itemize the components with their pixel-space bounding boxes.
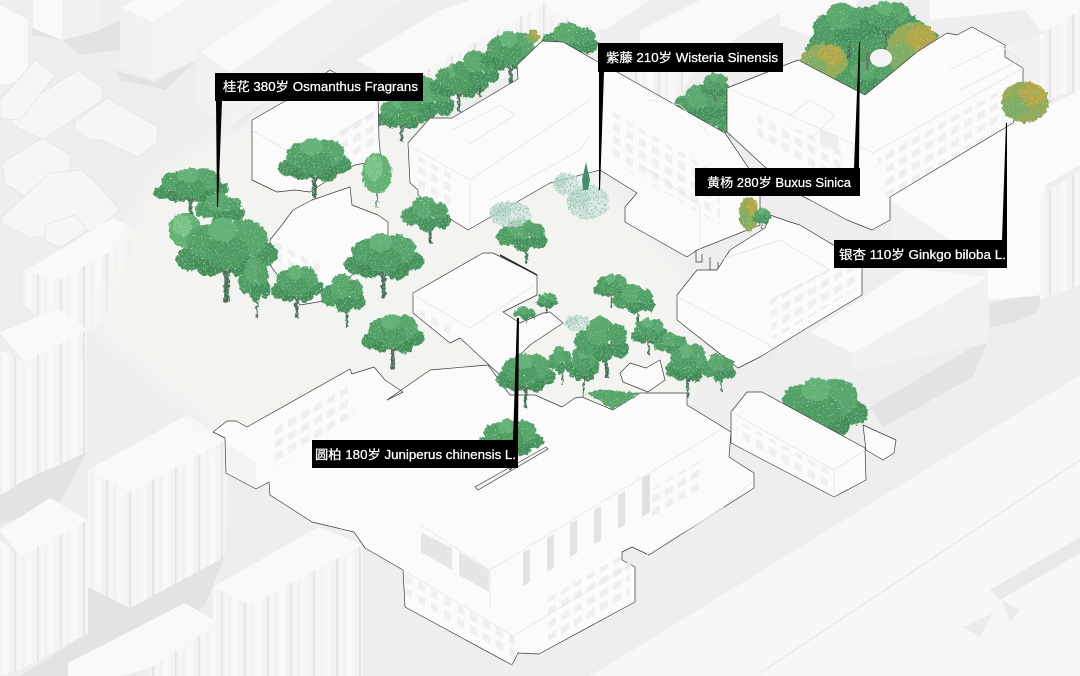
pale fading trees [489, 173, 609, 331]
label: Juniperus chinensis: 圆柏 180岁 Juniperus chinensis L. [315, 447, 516, 462]
residential towers [0, 218, 363, 676]
tree behind south-east building [772, 378, 868, 460]
label: Ginkgo biloba [834, 123, 1007, 268]
label: Osmanthus Fragrans [215, 73, 423, 207]
gate fragments [696, 250, 732, 274]
building: north long block [408, 41, 760, 257]
hedge [587, 390, 640, 410]
label: Buxus Sinica: 黄杨 280岁 Buxus Sinica [707, 175, 851, 190]
courtyard trees north [279, 138, 655, 369]
pale courtyard ring [870, 49, 892, 67]
label: Osmanthus Fragrans: 桂花 380岁 Osmanthus Fragrans [223, 79, 418, 94]
label: Ginkgo biloba: 银杏 110岁 Ginkgo biloba L. [839, 247, 1006, 262]
small annex building [620, 360, 665, 392]
eastern blocks [590, 90, 1080, 676]
small western houses [0, 60, 158, 248]
yellow tree and shrub [739, 197, 772, 232]
central tree cluster [476, 292, 736, 470]
label: Buxus Sinica [695, 42, 860, 196]
small cypress [582, 162, 590, 190]
building: south complex [213, 365, 754, 665]
hedge and front trees [154, 82, 1049, 470]
building: central block [413, 253, 563, 375]
ginkgo tree [1001, 82, 1049, 124]
building: south-east block [731, 392, 896, 497]
label: Wisteria Sinensis: 紫藤 210岁 Wisteria Sinensis [606, 50, 778, 65]
tree cluster behind east wing [673, 73, 730, 136]
label: Wisteria Sinensis [598, 43, 783, 190]
north-west towers [0, 0, 1080, 127]
trunk in ring [866, 52, 869, 70]
building: south-east hall [677, 215, 862, 368]
label: Juniperus chinensis [312, 318, 519, 468]
courtyard ground [95, 115, 700, 570]
building: west villa [270, 187, 388, 305]
building: north-west block [252, 70, 381, 192]
trees behind the buildings [375, 1, 940, 460]
tree row behind north building [375, 22, 598, 142]
building: east L-shaped block [727, 27, 1023, 230]
west tree group [154, 168, 365, 327]
rooftop courtyard trees [800, 1, 940, 100]
